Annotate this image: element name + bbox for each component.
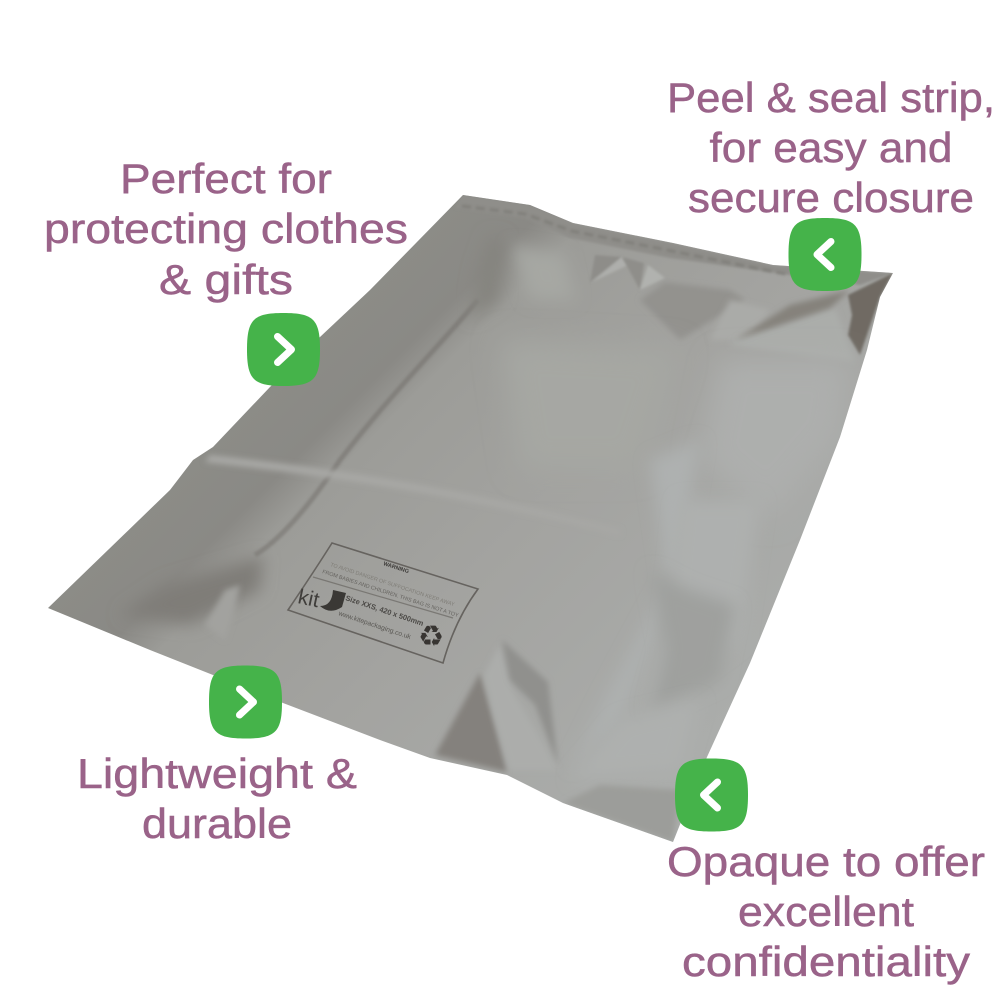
mailing bag bbox=[48, 195, 893, 842]
icon: left chevron top right bbox=[788, 218, 862, 291]
warning label on bag: Size XXS, 420 x 500mm bbox=[344, 593, 425, 628]
warning label on bag: kit bbox=[296, 585, 321, 612]
text: protecting clothes bbox=[44, 205, 408, 252]
warning label on bag: www.kitepackaging.co.uk bbox=[336, 610, 412, 641]
text: for easy and bbox=[710, 124, 952, 171]
icon: right chevron top left bbox=[247, 313, 320, 386]
caption: lightweight: Lightweight & bbox=[77, 750, 357, 797]
warning label on bag bbox=[288, 543, 478, 663]
text: secure closure bbox=[688, 174, 974, 221]
caption: opaque: Opaque to offer bbox=[667, 838, 985, 885]
warning label on bag: FROM BABIES AND CHILDREN. THIS BAG IS NOT A TOY bbox=[321, 569, 459, 619]
text: confidentiality bbox=[682, 938, 970, 985]
text: & gifts bbox=[159, 256, 293, 303]
text: durable bbox=[142, 800, 292, 847]
warning label on bag: WARNING bbox=[382, 561, 410, 575]
caption: peel and seal: Peel & seal strip, bbox=[667, 74, 995, 121]
warning label on bag: TO AVOID DANGER OF SUFFOCATION KEEP AWAY bbox=[329, 562, 456, 608]
icon: right chevron bottom left bbox=[209, 666, 282, 738]
warning label on bag: ♻ bbox=[418, 619, 444, 653]
caption: clothes and gifts: Perfect for bbox=[120, 155, 332, 202]
icon: left chevron bottom right bbox=[675, 758, 748, 832]
text: excellent bbox=[738, 888, 914, 935]
